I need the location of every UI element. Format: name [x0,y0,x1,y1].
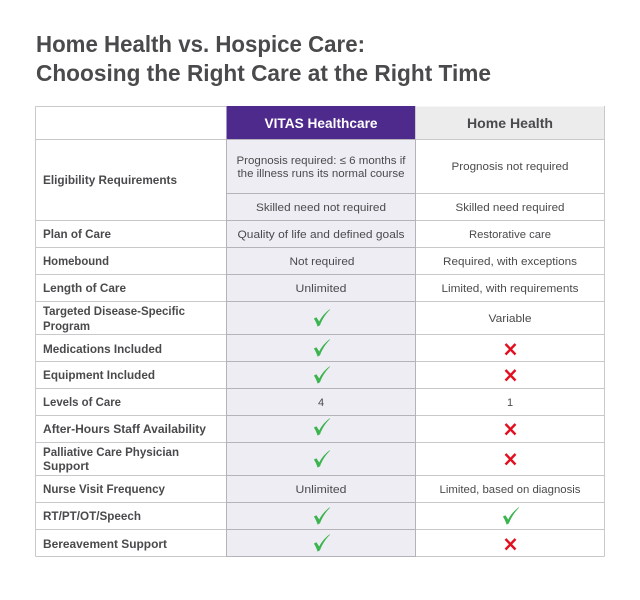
row labels: Homebound [43,254,109,268]
Home Health column values [440,161,581,496]
column header: Home Health [416,106,604,140]
row labels: After-Hours Staff Availability [43,422,206,436]
VITAS column values: Prognosis required: ≤ 6 months if [236,155,406,167]
row labels: RT/PT/OT/Speech [43,509,141,523]
row labels [43,173,206,551]
VITAS column values: Not required [290,256,354,268]
VITAS column values: Unlimited [296,484,346,496]
row labels: Palliative Care Physician [43,445,179,459]
VITAS column values: 4 [318,397,324,409]
row labels: Plan of Care [43,227,111,241]
row labels: Medications Included [43,342,162,356]
column header: VITAS Healthcare [226,106,416,140]
row labels: Eligibility Requirements [43,173,177,187]
VITAS column values: the illness runs its normal course [238,168,404,180]
Home Health column values: Prognosis not required [452,161,568,173]
icon: green check, Home Health RT/PT/OT/Speech [503,507,519,525]
row labels: Bereavement Support [43,537,167,551]
row labels: Levels of Care [43,395,121,409]
row labels: Equipment Included [43,368,155,382]
column header: VITAS Healthcare: VITAS Healthcare [264,115,378,131]
icons: green checks, VITAS column [314,309,330,552]
row labels: Nurse Visit Frequency [43,482,165,496]
row labels: Targeted Disease-Specific [43,304,185,318]
Home Health column values: 1 [507,397,513,409]
Home Health column values: Required, with exceptions [443,256,578,268]
VITAS column values: Skilled need not required [256,202,386,214]
Home Health column values: Variable [488,313,532,325]
comparison table [36,106,604,557]
panel: VITAS column background [226,139,416,557]
title: Choosing the Right Care at the Right Time [36,60,491,86]
VITAS column values [236,155,406,496]
icons: red crosses, Home Health column [506,344,516,550]
row labels: Program [43,319,90,333]
Home Health column values: Skilled need required [456,202,564,214]
VITAS column values: Quality of life and defined goals [238,229,405,241]
row labels: Length of Care [43,281,126,295]
column header: Home Health: Home Health [467,115,553,131]
title [36,31,491,86]
title: Home Health vs. Hospice Care: [36,31,365,57]
Home Health column values: Limited, with requirements [442,283,579,295]
Home Health column values: Limited, based on diagnosis [440,484,581,496]
row labels: Support [43,459,89,473]
Home Health column values: Restorative care [469,229,551,241]
VITAS column values: Unlimited [296,283,346,295]
